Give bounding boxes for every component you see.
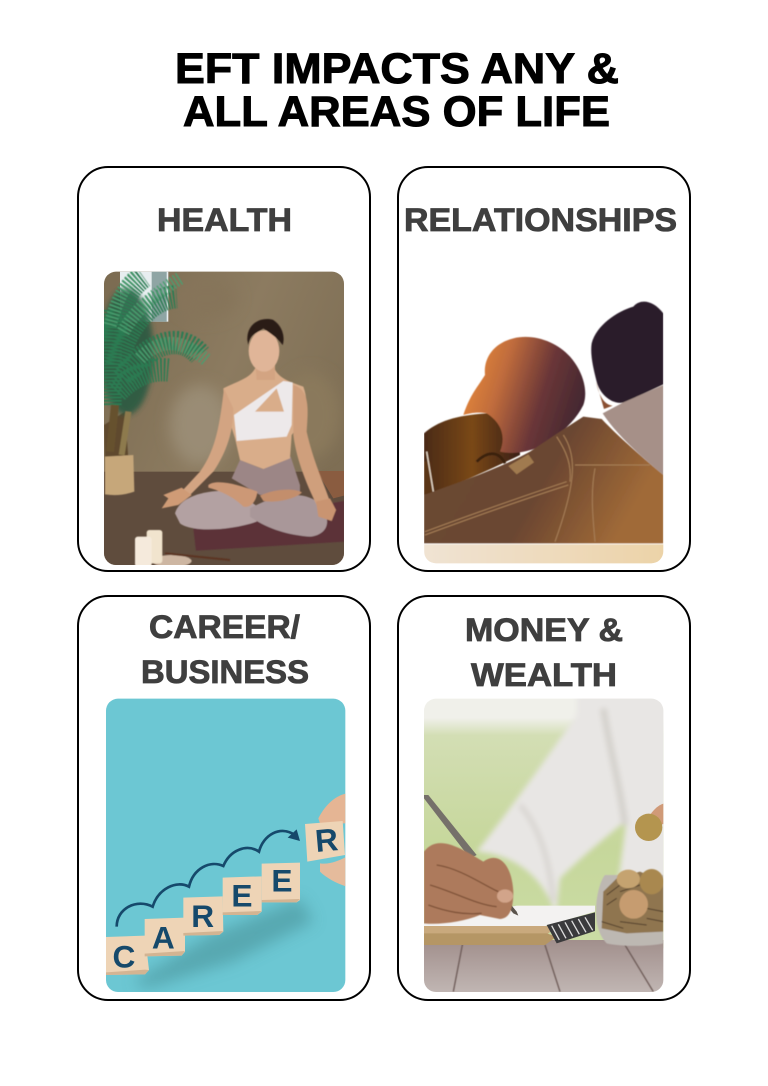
notebook	[424, 906, 595, 927]
woman's legs	[175, 491, 260, 529]
block letters: C	[113, 939, 135, 975]
heading: relationships: RELATIONSHIPS	[404, 202, 677, 238]
top	[234, 381, 293, 441]
his jacket	[424, 417, 663, 543]
shirt	[477, 695, 673, 908]
title: ALL AREAS OF LIFE	[183, 88, 610, 136]
shorts	[232, 457, 300, 495]
her jacket	[424, 413, 520, 495]
bench	[424, 544, 664, 564]
pen	[424, 795, 477, 858]
block letters: A	[152, 919, 175, 955]
hands	[162, 488, 192, 508]
block letters: E	[271, 863, 293, 899]
her hair	[463, 337, 585, 453]
infographic canvas	[77, 52, 691, 1001]
heading: health: HEALTH	[157, 202, 292, 238]
heading: career / business: CAREER/	[149, 609, 300, 645]
block letters	[114, 829, 338, 968]
hand	[318, 793, 347, 823]
plant fronds	[100, 288, 153, 415]
arrow line	[117, 831, 295, 927]
torso	[223, 365, 306, 469]
photo: couple at sunset	[424, 300, 664, 564]
mat	[193, 501, 344, 551]
coin jar	[596, 869, 664, 946]
panel: money & wealth	[398, 596, 690, 1000]
panel: relationships	[398, 167, 690, 572]
heading: money & wealth: WEALTH	[471, 657, 617, 693]
block letters: R	[191, 898, 214, 934]
panel: health	[78, 167, 370, 572]
block letters: R	[314, 821, 340, 859]
title: EFT IMPACTS ANY &	[175, 45, 619, 93]
heading: career / business: BUSINESS	[141, 654, 309, 690]
photo: career blocks	[100, 695, 350, 1002]
blocks	[106, 821, 345, 975]
block letters: E	[231, 877, 253, 913]
scarf	[603, 385, 663, 475]
photo: woman meditating	[100, 265, 350, 572]
title	[175, 45, 619, 136]
heading: career / business	[141, 609, 309, 690]
falling coin and fingers	[650, 804, 664, 824]
panel: career / business	[78, 596, 370, 1002]
feet	[208, 482, 257, 507]
hand	[424, 843, 513, 924]
heading: money & wealth	[465, 612, 623, 693]
heading: money & wealth: MONEY &	[465, 612, 623, 648]
his hair	[591, 302, 663, 403]
candles	[154, 554, 192, 565]
arms	[184, 392, 232, 495]
table	[424, 940, 664, 992]
photo: writing and coins	[420, 695, 673, 997]
neck and face	[257, 366, 276, 379]
